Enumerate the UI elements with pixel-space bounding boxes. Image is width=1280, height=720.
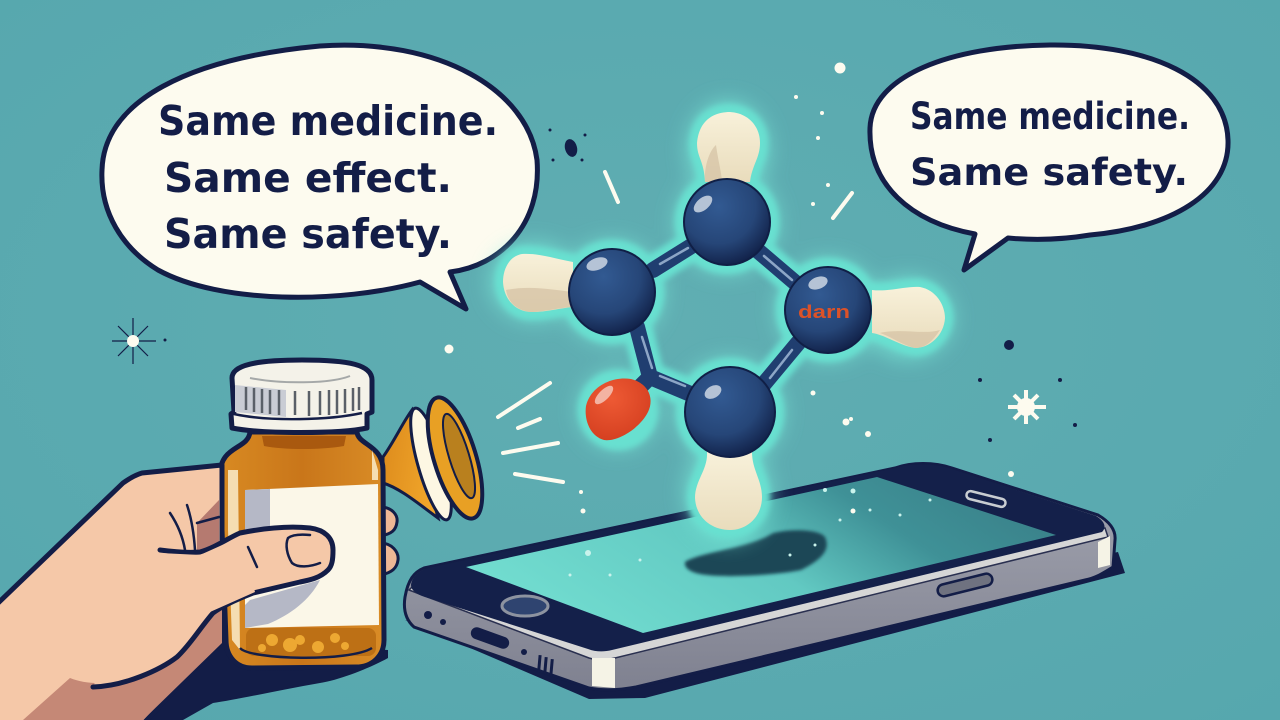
oxygen atom [586, 379, 651, 440]
fingers behind bottle [380, 507, 398, 575]
teal ring [503, 112, 945, 530]
text: left bubble: Same medicine. [158, 97, 498, 145]
thumb [93, 527, 333, 687]
cap ridges [234, 376, 362, 419]
earpiece [966, 490, 1006, 508]
atom label: darn [798, 302, 850, 322]
home button [502, 596, 548, 616]
finger shade [197, 500, 219, 560]
carbon atoms [569, 179, 871, 457]
spout white ring [403, 405, 459, 523]
bottle body [220, 432, 384, 668]
bottle neck [262, 436, 346, 449]
hand shade [23, 608, 222, 720]
spout gold ring [416, 392, 494, 524]
bottle label [245, 484, 379, 628]
charging port [469, 626, 511, 650]
text: left bubble: Same effect. [164, 154, 452, 202]
finger creases [170, 505, 257, 567]
thumb nail [287, 535, 320, 566]
back of hand [0, 465, 222, 720]
side button [936, 572, 994, 598]
text: right bubble [910, 95, 1190, 194]
speech bubble: right [870, 45, 1228, 270]
phone screen [466, 477, 1056, 633]
skin cover [60, 537, 255, 684]
bottle cap [231, 360, 372, 432]
text: right bubble: Same safety. [910, 151, 1188, 194]
surface shadow [143, 640, 388, 720]
speech bubble: left [102, 45, 537, 309]
label shade [245, 489, 320, 628]
smartphone [404, 464, 1125, 699]
molecule [489, 100, 954, 542]
motion lines near bottle [498, 383, 563, 482]
hydrogen atoms [503, 112, 945, 530]
hydrogen shading [506, 145, 940, 348]
bottle highlights [228, 450, 378, 650]
phone body [404, 464, 1115, 690]
spout inner ring [437, 411, 481, 501]
text: right bubble: Same medicine. [910, 95, 1190, 138]
phone front [411, 464, 1104, 651]
text: left bubble [158, 97, 498, 258]
oxygen highlight [592, 383, 616, 407]
phone shadow [405, 552, 1125, 699]
atom highlights [585, 192, 829, 402]
bonds [635, 245, 798, 395]
hand and bottle [0, 360, 494, 720]
metal highlights [592, 658, 615, 688]
screen shadow of molecule [685, 530, 827, 576]
bottle spout [383, 410, 438, 518]
text: left bubble: Same safety. [164, 210, 452, 258]
phone rim [409, 528, 1108, 660]
port details [424, 611, 554, 677]
glow [489, 100, 954, 542]
sparkles and particles [112, 62, 1077, 514]
screen speckles [568, 488, 932, 576]
pills [240, 628, 376, 658]
